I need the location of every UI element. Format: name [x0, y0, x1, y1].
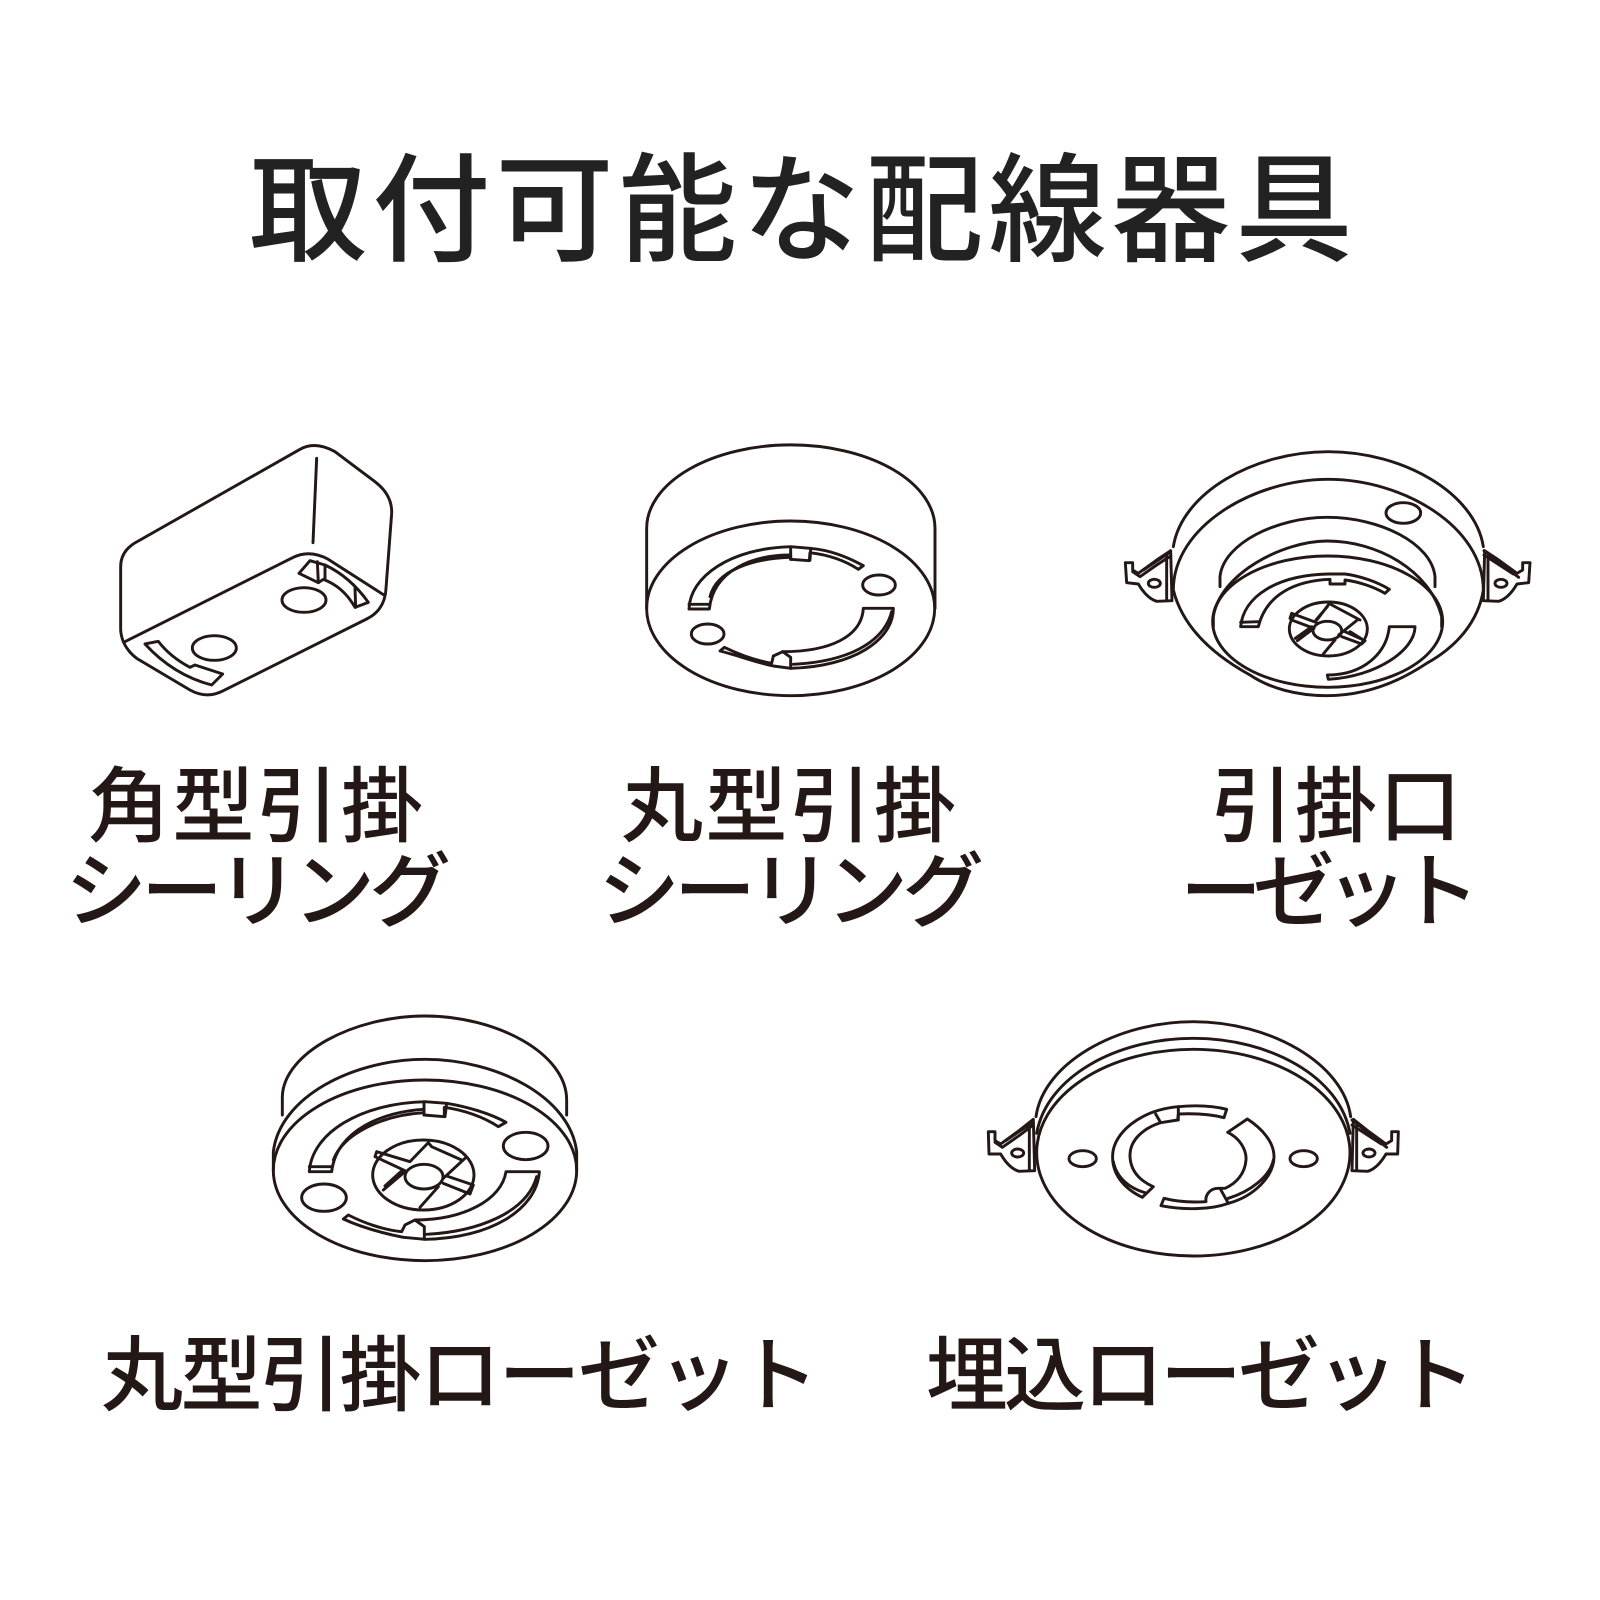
- icon: hook rosette: [1125, 452, 1530, 696]
- icon: square hook ceiling: [121, 446, 392, 695]
- icon: round hook ceiling: [647, 445, 935, 696]
- icon: recessed rosette: [988, 1022, 1398, 1256]
- label: hook rosette line 1: 引掛口: [1211, 762, 1461, 853]
- hub: [1289, 602, 1367, 656]
- label: round hook ceiling: 丸型引掛: [621, 762, 956, 853]
- clip right: [1483, 551, 1530, 601]
- clip left: [1125, 551, 1172, 601]
- label: recessed rosette: 埋込ローゼット: [926, 1331, 1476, 1422]
- label: round hook rosette: 丸型引掛ローゼット: [101, 1331, 819, 1422]
- clip left: [988, 1119, 1035, 1171]
- title: 取付可能な配線器具: [249, 146, 1353, 278]
- clip right: [1352, 1119, 1398, 1171]
- label: ceiling line 2: シーリング: [598, 847, 984, 938]
- label: square hook ceiling: 角型引掛: [88, 762, 423, 853]
- label: ceiling line 1: シーリング: [65, 847, 451, 938]
- icon: round hook rosette: [273, 1016, 577, 1261]
- label: hook rosette line 2: ーゼット: [1180, 847, 1480, 938]
- hub: [373, 1140, 474, 1210]
